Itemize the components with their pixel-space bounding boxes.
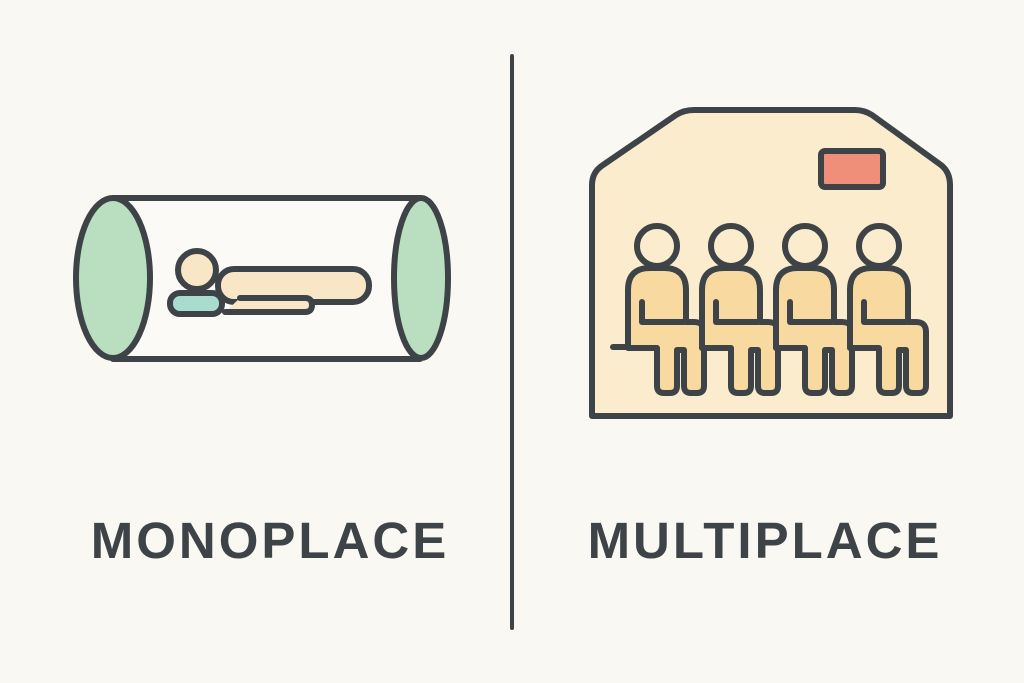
divider: [510, 56, 514, 628]
body: [218, 269, 369, 302]
head: [178, 251, 216, 289]
indicator panel: [821, 151, 883, 187]
people: [628, 226, 926, 393]
icon: multiplace chamber: [592, 110, 950, 416]
label: monoplace: MONOPLACE: [91, 512, 449, 569]
pillow: [170, 293, 222, 314]
icon: monoplace chamber: [76, 198, 448, 359]
bench: [613, 344, 660, 350]
label: multiplace: MULTIPLACE: [588, 512, 942, 569]
